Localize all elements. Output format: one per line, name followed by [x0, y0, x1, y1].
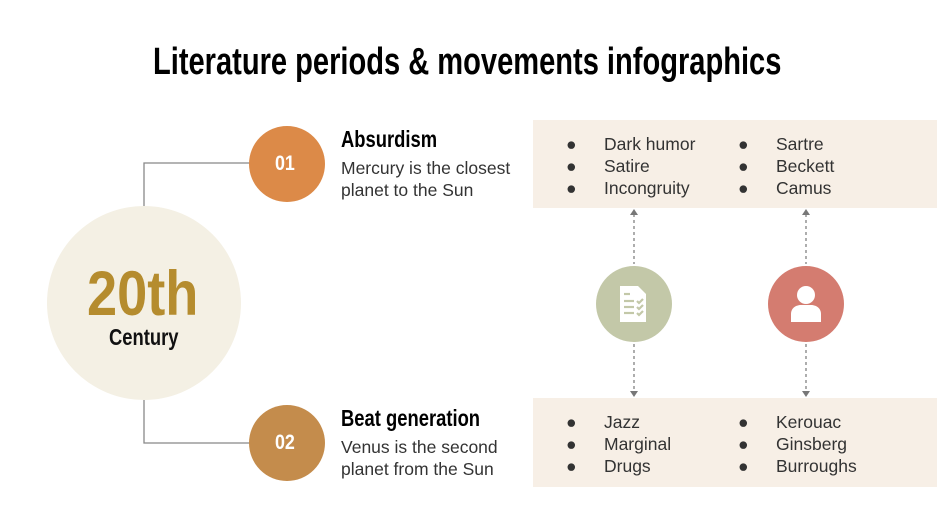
panel: top lists	[533, 120, 937, 208]
panel: top lists: Camus	[776, 178, 831, 198]
panel: bottom lists: Drugs	[604, 456, 651, 476]
central circle: 20th Century: 20th	[87, 259, 198, 329]
panel: bottom lists: Burroughs	[776, 456, 857, 476]
badge 01: 01	[275, 152, 295, 175]
panel: top lists: ●	[738, 134, 749, 154]
icon: person	[768, 266, 844, 342]
text: Beat generation	[341, 405, 498, 479]
panel: bottom lists: ●	[566, 434, 577, 454]
title: Literature periods & movements infographics	[153, 41, 781, 83]
panel: bottom lists	[533, 398, 937, 487]
panel: bottom lists: ●	[738, 434, 749, 454]
panel: top lists: Sartre	[776, 134, 824, 154]
panel: bottom lists: Kerouac	[776, 412, 841, 432]
central circle: 20th Century: Century	[109, 324, 179, 350]
panel: bottom lists: Ginsberg	[776, 434, 847, 454]
panel: top lists: ●	[738, 178, 749, 198]
text: Absurdism: Mercury is the closest planet to the Sun	[341, 158, 510, 200]
panel: top lists: ●	[738, 156, 749, 176]
panel: bottom lists: ●	[738, 412, 749, 432]
panel: top lists: Dark humor	[604, 134, 695, 154]
panel: bottom lists: ●	[566, 412, 577, 432]
icon: document	[596, 266, 672, 342]
panel: bottom lists: ●	[738, 456, 749, 476]
badge 01	[249, 126, 325, 202]
panel: top lists: Beckett	[776, 156, 834, 176]
panel: bottom lists: ●	[566, 456, 577, 476]
panel: top lists: ●	[566, 134, 577, 154]
badge 02: 02	[275, 431, 295, 454]
text: Absurdism: Absurdism	[341, 126, 437, 152]
badge 02	[249, 405, 325, 481]
central circle: 20th Century	[47, 206, 241, 400]
text: Beat generation: Venus is the second planet from the Sun	[341, 437, 498, 479]
text: Beat generation: Beat generation	[341, 405, 480, 431]
panel: top lists: ●	[566, 178, 577, 198]
panel: bottom lists: Marginal	[604, 434, 671, 454]
text: Absurdism	[341, 126, 510, 200]
panel: top lists: Incongruity	[604, 178, 690, 198]
panel: bottom lists: Jazz	[604, 412, 640, 432]
panel: top lists: ●	[566, 156, 577, 176]
panel: top lists: Satire	[604, 156, 650, 176]
